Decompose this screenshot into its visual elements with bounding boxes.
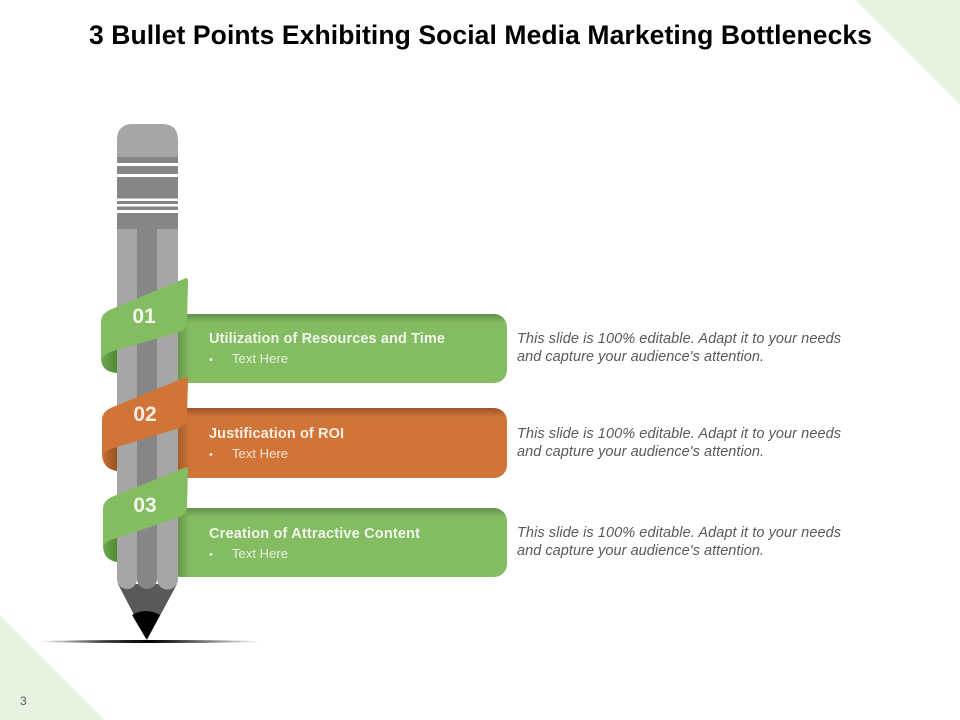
title: 3 Bullet Points Exhibiting Social Media Marketing Bottlenecks [89,20,872,50]
ribbon 03 [103,467,188,562]
text block 2 [517,426,841,460]
text block 1: This slide is 100% editable. Adapt it to your needs [517,331,841,347]
bar 3 heading: Creation of Attractive Content [209,526,420,542]
pencil eraser [117,124,178,157]
ribbon 01 [101,278,188,373]
panel: bar 1 [170,314,507,383]
ribbon 02 number: 02 [133,403,157,426]
text block 2: This slide is 100% editable. Adapt it to your needs [517,426,841,442]
bar 1 bullet: Text Here [232,351,288,366]
pencil band [117,157,178,229]
pencil tip [118,584,177,640]
bar 1 heading: Utilization of Resources and Time [209,331,445,347]
text block 1: and capture your audience's attention. [517,349,764,365]
icon: ground shadow [38,640,262,643]
bar 2 heading: Justification of ROI [209,426,344,442]
bar 2 bullet: • [209,449,213,461]
bar 3 bullet: • [209,549,213,561]
ribbon 02 [102,377,188,471]
icon: pencil [117,124,178,640]
decorative corner: top right [855,0,960,105]
panel: bar 2 [170,408,507,478]
text block 3: and capture your audience's attention. [517,543,764,559]
bar 3 bullet: Text Here [232,546,288,561]
bar 2 bullet: Text Here [232,446,288,461]
text block 3 [517,525,841,559]
ribbon 03 number: 03 [133,494,157,517]
pencil lead [132,611,160,639]
bar 1 bullet: • [209,354,213,366]
ribbon 01 number: 01 [132,305,156,328]
decorative corner: bottom left [0,615,105,720]
text block 1 [517,331,841,365]
text block 3: This slide is 100% editable. Adapt it to your needs [517,525,841,541]
text block 2: and capture your audience's attention. [517,444,764,460]
page number: 3 [20,694,27,708]
panel: bar 3 [170,508,507,577]
pencil body [117,229,137,589]
